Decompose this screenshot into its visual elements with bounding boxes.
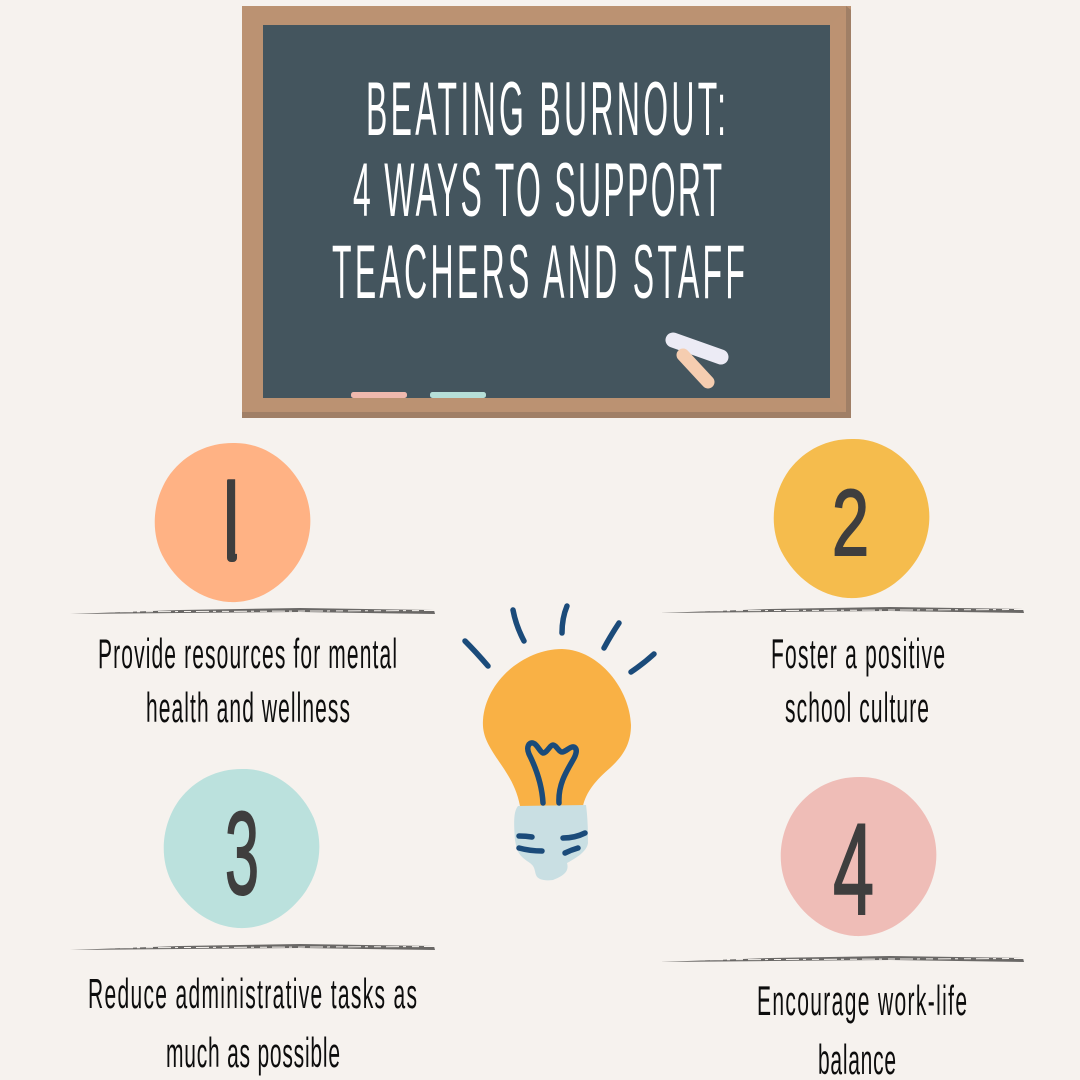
bulb glass — [483, 649, 631, 806]
icon: light bulb — [465, 606, 654, 880]
number badge 4 — [781, 777, 936, 936]
base thread marks — [519, 833, 585, 853]
chalk: teal stick — [430, 392, 486, 398]
description: much as possible — [166, 1030, 340, 1077]
divider — [70, 608, 435, 614]
numeral 3: 3 — [225, 788, 259, 920]
description — [757, 978, 967, 1080]
numeral 4: 4 — [833, 796, 874, 942]
numeral 2: 2 — [832, 470, 869, 575]
board surface — [263, 25, 830, 398]
panel: chalkboard — [242, 6, 851, 418]
description — [771, 631, 945, 732]
chalk: pink stick — [351, 392, 407, 398]
step 2 — [660, 439, 1024, 732]
light rays — [465, 606, 654, 672]
title: 4 WAYS TO SUPPORT — [353, 148, 722, 233]
description: health and wellness — [146, 685, 350, 732]
description: Encourage work-life — [757, 978, 967, 1025]
number badge 1 — [155, 443, 310, 602]
step 4 — [660, 777, 1024, 1080]
divider — [660, 956, 1024, 962]
description — [98, 631, 397, 732]
numeral 1: 1 — [207, 454, 252, 590]
description: Foster a positive — [771, 631, 945, 678]
divider — [660, 607, 1024, 613]
step 3 — [70, 769, 435, 1077]
number badge 3 — [164, 769, 319, 928]
divider — [70, 944, 435, 950]
chalk: white piece — [673, 340, 721, 357]
description: Provide resources for mental — [98, 631, 397, 678]
chalk: peach piece — [683, 355, 708, 382]
filament — [528, 743, 576, 803]
title: BEATING BURNOUT: — [366, 67, 726, 152]
bulb base — [514, 805, 588, 880]
step 1 — [70, 443, 435, 732]
description: Reduce administrative tasks as — [88, 971, 417, 1018]
description: school culture — [785, 685, 929, 732]
number badge 2 — [774, 439, 929, 598]
wooden frame — [242, 6, 851, 418]
title: TEACHERS AND STAFF — [332, 230, 745, 315]
description — [88, 971, 417, 1077]
title — [332, 67, 745, 315]
